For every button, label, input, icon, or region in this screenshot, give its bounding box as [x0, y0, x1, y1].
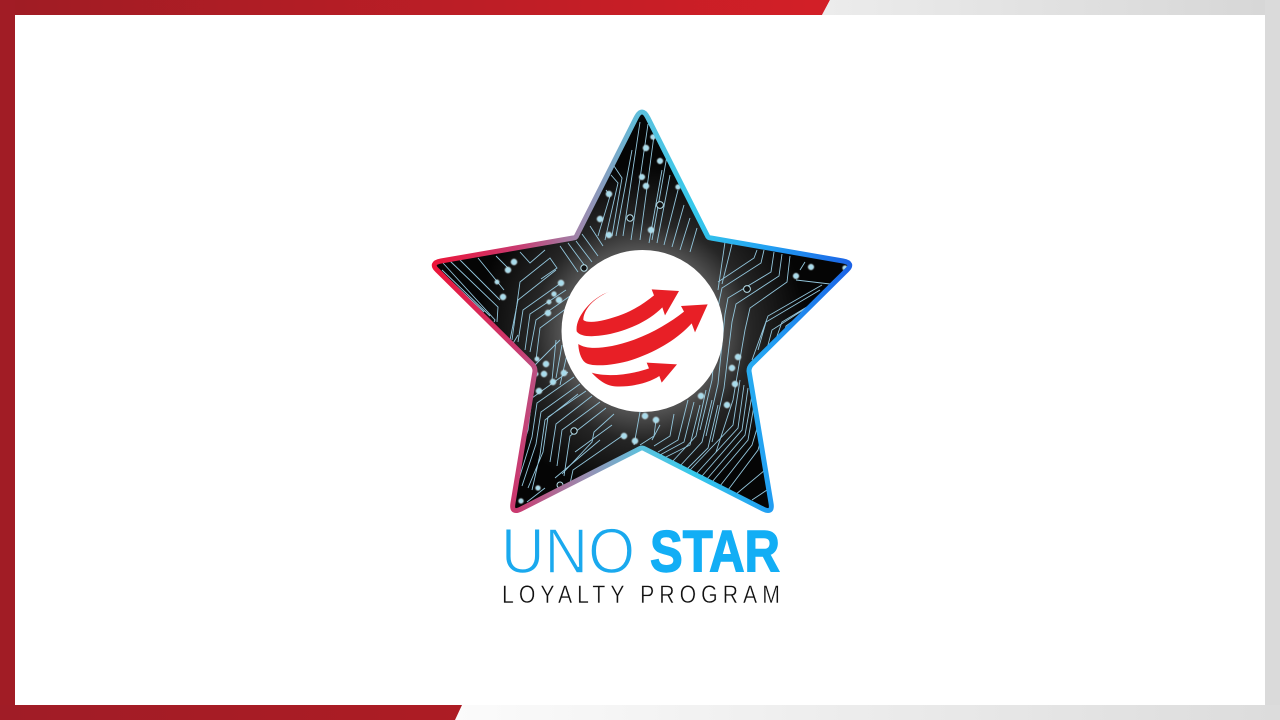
frame: top grey band — [822, 0, 1280, 15]
frame: left red band — [0, 0, 15, 720]
frame: bottom grey band — [455, 705, 1280, 720]
star: gradient outline — [434, 112, 850, 511]
centre white circle — [562, 250, 724, 412]
frame: bottom red band — [0, 705, 462, 720]
tagline: LOYALTY PROGRAM: LOYALTY PROGRAM — [502, 580, 780, 608]
arrow: top swoosh — [577, 289, 679, 336]
logo: star badge — [434, 112, 850, 511]
icon: red globe arrows — [577, 289, 708, 386]
wordmark: UNO STAR — [501, 515, 780, 587]
star: dark fill — [434, 112, 850, 511]
star: circuit nodes — [495, 134, 847, 503]
arrow: lower swoosh — [592, 363, 677, 386]
frame: top red band — [0, 0, 830, 15]
star: circuit traces — [437, 122, 845, 502]
frame: right grey band — [1265, 0, 1280, 720]
wordmark: UNO: UNO — [501, 515, 635, 587]
wordmark: STAR: STAR — [650, 520, 780, 584]
arrow: middle swoosh — [578, 304, 708, 365]
star: hollow circuit rings — [557, 202, 750, 488]
